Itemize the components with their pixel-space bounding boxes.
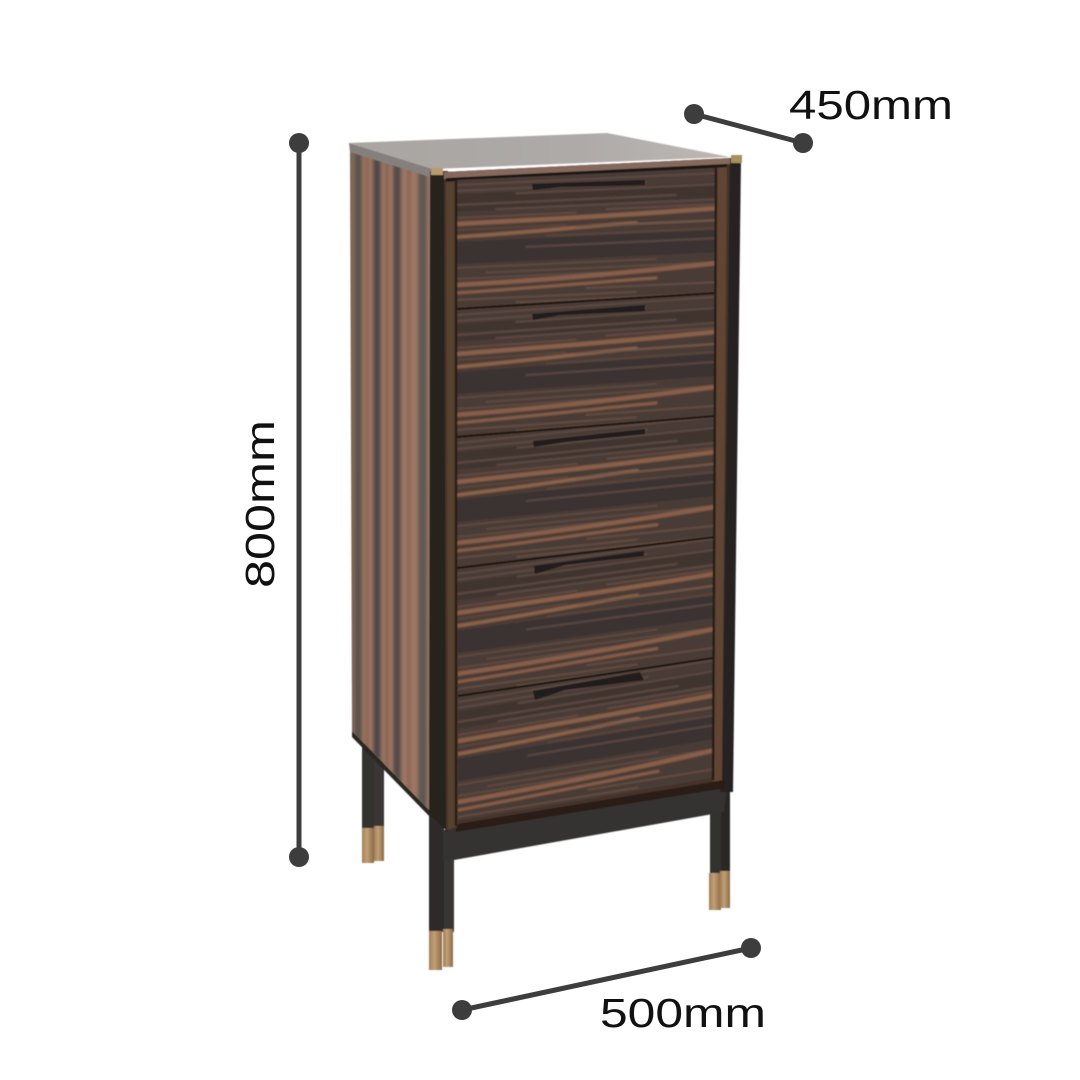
back legs (362, 745, 384, 863)
top surface (349, 133, 730, 169)
dimension: depth 450mm: 450mm (789, 82, 953, 128)
side panel with vertical stripes (349, 152, 431, 810)
front frame (444, 158, 730, 830)
drawer 1 (456, 168, 716, 308)
dimension: depth 450mm (684, 82, 953, 153)
dimension: height 800mm: 800mm (237, 420, 283, 588)
drawer 3 (456, 416, 714, 568)
front left legs (429, 800, 454, 970)
dimension: width 500mm: 500mm (600, 990, 766, 1036)
right post (720, 158, 741, 792)
front left post (429, 171, 448, 832)
infographic: chest of drawers with dimensions (246, 90, 950, 1028)
drawer handles (532, 180, 645, 700)
right legs (709, 785, 730, 910)
drawer 5 (457, 658, 713, 820)
bottom rail (443, 785, 727, 860)
drawer gaps (456, 168, 716, 826)
drawer 4 (456, 537, 714, 696)
photo: chest of drawers (340, 133, 742, 970)
dimension: width 500mm (452, 938, 766, 1036)
drawer 2 (456, 294, 715, 436)
dimension: height 800mm (237, 133, 309, 867)
